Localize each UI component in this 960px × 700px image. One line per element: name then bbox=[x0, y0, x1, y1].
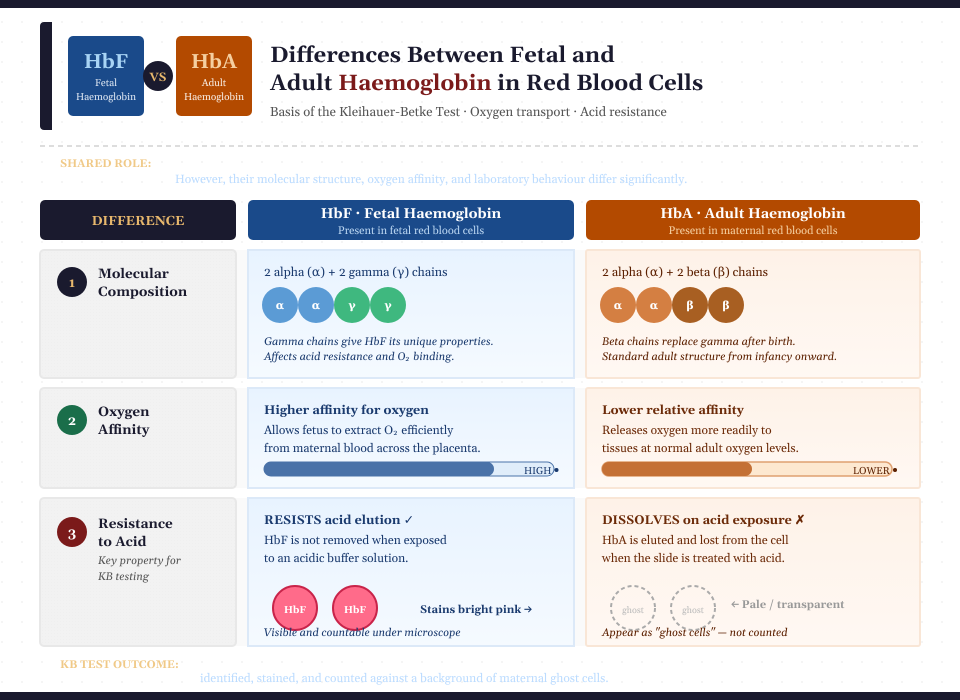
HbF affinity bar bbox=[264, 462, 558, 478]
row 3 HbF cell: HbF is not removed when exposed bbox=[264, 534, 447, 549]
row 1 label cell bbox=[40, 250, 236, 378]
column header: HbF bbox=[248, 200, 574, 240]
row 2 label cell: Affinity bbox=[97, 421, 150, 439]
row 1 HbA cell: 2 alpha (α) + 2 beta (β) chains bbox=[602, 265, 768, 281]
row 2 HbF cell: Allows fetus to extract O₂ efficiently bbox=[263, 424, 454, 439]
row 3 HbA cell: ← Pale / transparent bbox=[731, 598, 845, 612]
row 3 HbA cell: HbA is eluted and lost from the cell bbox=[602, 534, 789, 549]
row 1 HbF cell: Gamma chains give HbF its unique properties. bbox=[264, 335, 494, 349]
column header: difference: DIFFERENCE bbox=[92, 214, 184, 230]
row 1 HbA cell: Beta chains replace gamma after birth. bbox=[602, 335, 796, 349]
VS badge: VS bbox=[149, 71, 167, 86]
HbF affinity bar: HIGH bbox=[524, 466, 551, 478]
HbA affinity bar: LOWER bbox=[853, 466, 890, 478]
title: Adult Haemoglobin in Red Blood Cells bbox=[269, 70, 703, 98]
row 1 HbF cell bbox=[248, 250, 574, 378]
subtitle: Basis of the Kleihauer-Betke Test · Oxygen transport · Acid resistance bbox=[270, 105, 667, 121]
row 3 label cell: to Acid bbox=[98, 533, 147, 551]
row 3 HbA cell: DISSOLVES on acid exposure ✗ bbox=[602, 513, 805, 529]
row 3: resistance to acid bbox=[40, 498, 920, 646]
header accent bar bbox=[40, 22, 52, 130]
VS badge bbox=[143, 61, 173, 91]
bottom bar bbox=[0, 692, 960, 700]
row 3 HbF cell: Visible and countable under microscope bbox=[264, 626, 461, 640]
column header: HbA: Present in maternal red blood cells bbox=[669, 224, 838, 238]
ghost cell bbox=[671, 586, 715, 630]
row 3 label cell bbox=[40, 498, 236, 646]
row 3 HbA cell: when the slide is treated with acid. bbox=[601, 552, 785, 567]
row 1 label cell: Composition bbox=[98, 283, 188, 301]
row 1 HbF cell: 2 alpha (α) + 2 gamma (γ) chains bbox=[264, 265, 447, 281]
row 3 HbA cell bbox=[586, 498, 920, 646]
row 2 HbF cell: Higher affinity for oxygen bbox=[264, 403, 429, 419]
badge: HbA: Haemoglobin bbox=[184, 92, 244, 104]
badge: HbF bbox=[68, 36, 144, 116]
stained cell: HbF bbox=[344, 605, 366, 617]
column header: HbF: HbF · Fetal Haemoglobin bbox=[321, 205, 502, 223]
row 1 label cell: 1 bbox=[69, 276, 75, 292]
badge: HbA bbox=[176, 36, 252, 116]
ghost cell: ghost bbox=[682, 606, 705, 617]
row 1 HbA cell: α bbox=[614, 299, 623, 313]
badge: HbA: Adult bbox=[201, 78, 227, 90]
column header: difference bbox=[40, 200, 236, 240]
shared role label: SHARED ROLE: bbox=[60, 157, 152, 171]
row 3 HbF cell: RESISTS acid elution ✓ bbox=[264, 513, 414, 529]
ghost cell: ghost bbox=[622, 606, 645, 617]
column header: HbF: Present in fetal red blood cells bbox=[338, 224, 484, 238]
stained cell bbox=[333, 586, 377, 630]
badge: HbF: HbF bbox=[84, 49, 128, 75]
row 3 label cell: 3 bbox=[68, 526, 76, 542]
row 1: molecular composition bbox=[40, 250, 920, 378]
row 2 HbF cell bbox=[248, 388, 574, 488]
KB test outcome text: identified, stained, and counted against a background of maternal ghost cells. bbox=[200, 672, 609, 687]
row 2 HbA cell: Releases oxygen more readily to bbox=[602, 424, 772, 439]
row 3 label cell: Key property for bbox=[98, 554, 182, 568]
title: Differences Between Fetal and bbox=[270, 42, 615, 70]
row 2: oxygen affinity bbox=[40, 388, 920, 488]
title bbox=[269, 42, 703, 98]
row 1 HbA cell: β bbox=[722, 299, 730, 313]
HbA affinity bar bbox=[602, 462, 897, 478]
row 1 HbF cell: γ bbox=[348, 299, 356, 313]
row 2 label cell bbox=[40, 388, 236, 488]
row 1 HbF cell: α bbox=[276, 299, 285, 313]
badge: HbF: Haemoglobin bbox=[76, 92, 136, 104]
row 1 HbA cell: α bbox=[650, 299, 659, 313]
row 2 HbA cell: tissues at normal adult oxygen levels. bbox=[602, 442, 799, 457]
row 1 HbA cell: β bbox=[686, 299, 694, 313]
row 1 HbA cell: Standard adult structure from infancy onward. bbox=[602, 350, 837, 364]
row 2 HbA cell: Lower relative affinity bbox=[602, 403, 745, 419]
top bar bbox=[0, 0, 960, 8]
badge: HbA: HbA bbox=[191, 49, 238, 75]
row 2 HbF cell: from maternal blood across the placenta. bbox=[264, 442, 481, 457]
row 1 label cell: Molecular bbox=[98, 265, 169, 283]
stained cell: HbF bbox=[284, 605, 306, 617]
row 2 label cell: 2 bbox=[68, 414, 76, 430]
row 1 HbF cell: γ bbox=[384, 299, 392, 313]
row 1 HbF cell: α bbox=[312, 299, 321, 313]
row 3 label cell: KB testing bbox=[98, 570, 150, 584]
row 3 HbF cell: Stains bright pink → bbox=[420, 603, 532, 617]
row 3 HbA cell: Appear as "ghost cells" — not counted bbox=[601, 626, 788, 640]
column header: HbA bbox=[586, 200, 920, 240]
row 2 HbA cell bbox=[586, 388, 920, 488]
row 3 HbF cell bbox=[248, 498, 574, 646]
row 2 label cell: Oxygen bbox=[98, 403, 150, 421]
column header: HbA: HbA · Adult Haemoglobin bbox=[660, 205, 846, 223]
row 3 label cell: Resistance bbox=[98, 515, 173, 533]
badge: HbF: Fetal bbox=[95, 78, 117, 90]
row 3 HbF cell: to an acidic buffer solution. bbox=[264, 552, 408, 567]
ghost cell bbox=[611, 586, 655, 630]
stained cell bbox=[273, 586, 317, 630]
KB test outcome label: KB TEST OUTCOME: bbox=[60, 658, 179, 672]
row 1 HbA cell bbox=[586, 250, 920, 378]
shared role text: However, their molecular structure, oxygen affinity, and laboratory behaviour differ significantly. bbox=[175, 173, 687, 188]
row 1 HbF cell: Affects acid resistance and O₂ binding. bbox=[263, 350, 455, 364]
